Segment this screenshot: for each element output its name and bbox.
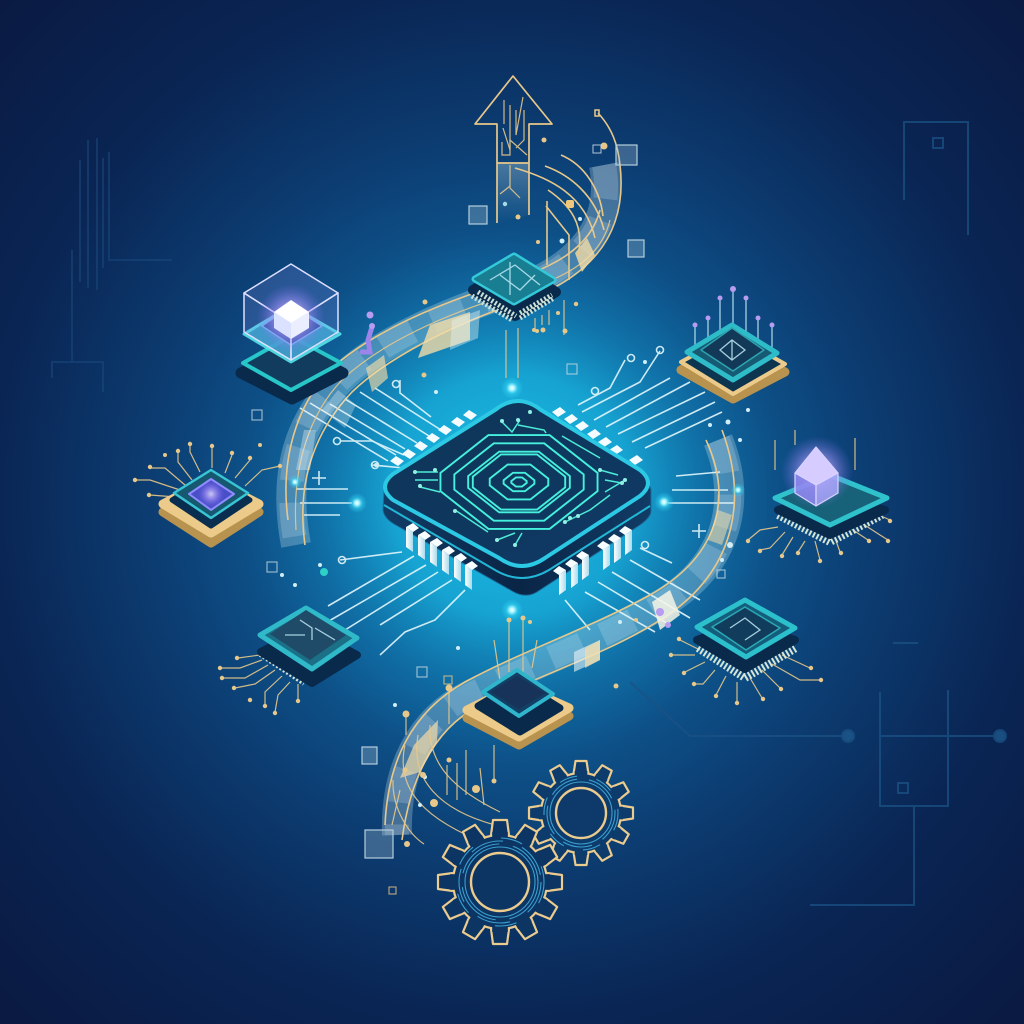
gear large [438,820,562,944]
base [261,628,357,683]
purple cube [795,447,838,506]
gear teeth [438,820,562,944]
chip surface pads [413,410,627,547]
background circuit lines: left [52,138,172,392]
antenna lines [695,290,772,365]
terminals [536,138,608,244]
background circuit frame: top right [904,122,968,235]
terminals [746,519,892,563]
stack plate [243,336,341,390]
arrow outline [475,76,552,223]
traces [748,430,890,560]
ribbon: lower S band [385,430,735,845]
terminals [402,616,526,807]
top surface [260,608,357,669]
connector traces: bottom-left bundle [322,552,465,655]
terminals [133,442,282,497]
chip body side [383,404,651,595]
pins [261,653,305,682]
arrow with circuit interior [475,76,552,223]
stack base [241,346,343,399]
purple glow [781,436,853,508]
chip top [483,670,553,716]
chip body [478,682,560,732]
top [701,328,764,371]
pins [472,292,554,320]
pins [778,515,882,542]
chip pins: upper edges [390,407,643,466]
gold curved lines near arrow [515,110,620,280]
plate [775,475,887,525]
terminal pale [503,202,507,206]
interior traces [500,97,527,198]
top-left stack with glass cube [241,264,343,399]
terminals [218,656,300,715]
connector traces: bottom-right bundle [565,542,700,632]
mid layer [697,600,795,657]
gold base [467,695,569,745]
circuit rings [456,838,544,926]
small square outlines [252,145,725,894]
chip lower pins [406,523,632,595]
base [778,495,885,535]
gear teeth [529,761,633,865]
connector traces: top-right bundle [578,346,722,448]
top-right gold-based chip [681,286,785,399]
scattered data dots [280,360,750,847]
glowing node dots around central chip [288,377,745,621]
tooth joins [539,771,623,855]
top layer [712,607,780,650]
right chip with purple cube [746,430,892,563]
gold base [681,343,785,399]
terminals [669,637,823,705]
chip rim line [384,505,650,578]
central processor chip [383,401,651,595]
translucent floating squares [362,145,644,858]
terminals below the top chip [422,300,578,378]
right-bottom chip [669,600,823,705]
dark chip [172,475,250,526]
thin stems [406,688,484,805]
antenna dots [692,286,774,328]
traces [135,445,280,497]
shaft translucent fill [497,163,529,223]
gear body [453,835,547,929]
chip surface traces [415,420,625,545]
ribbon: upper S band [286,165,621,545]
connector traces: top-left bundle [300,380,441,468]
traces [672,640,820,702]
glass cube [244,264,338,360]
traces [220,655,298,712]
body [687,325,777,380]
glow plate [244,306,340,362]
concentric octagon traces [440,435,598,529]
top surface [475,256,553,302]
tooth joins [450,832,550,932]
bottom gold-based chip [402,616,569,807]
vertical traces [494,620,537,780]
gear hole [556,788,606,838]
connector traces: horizontal left and right [296,471,735,538]
gear body [541,773,621,853]
gear small [529,761,633,865]
background circuit frame: bottom right [630,643,1006,905]
circuit rings [544,776,618,850]
base [697,622,795,669]
left gold-based chip [133,442,282,543]
glowing core [257,284,325,352]
inner plate [262,306,322,345]
gear hole [471,853,529,911]
pins [698,648,796,678]
terminal gold [516,214,520,220]
chip top surface [385,401,648,566]
gold base [163,487,259,543]
small purple figure [362,312,375,352]
top chip on ribbon [472,256,556,320]
purple core [189,479,234,510]
bottom-left chip [218,608,357,715]
